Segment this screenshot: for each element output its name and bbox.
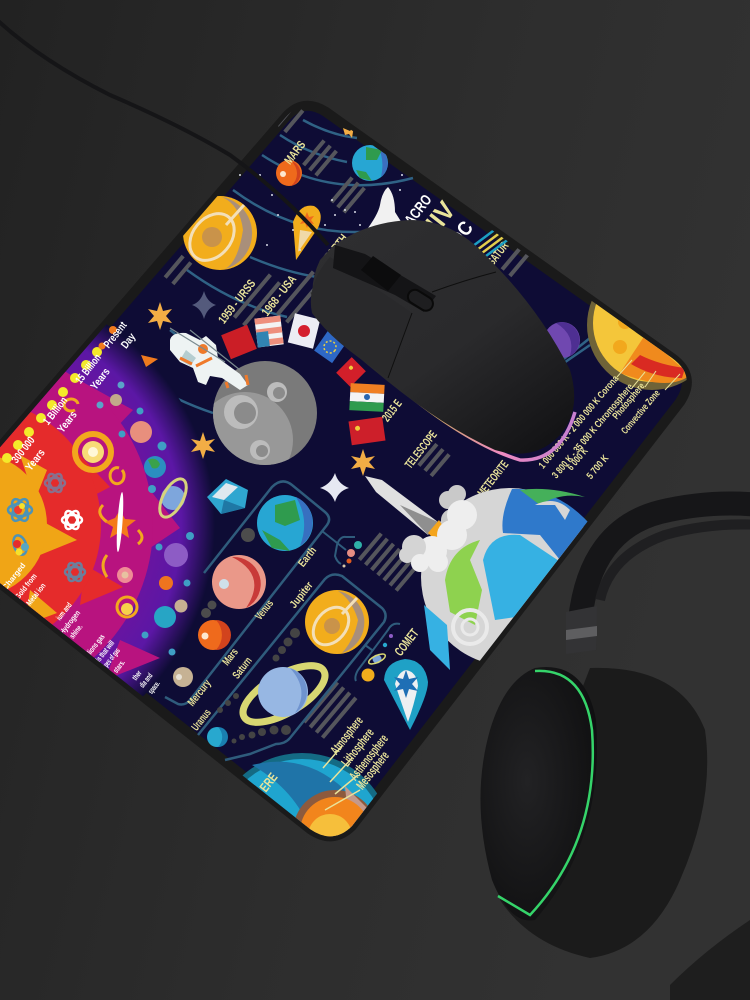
timeline labels: ypes of gas (100, 646, 122, 671)
timeline labels: 300 000 (10, 435, 38, 466)
mouse cable (0, 18, 328, 245)
upper jupiter (181, 196, 257, 270)
top labels: NIV (413, 195, 461, 245)
top labels: ACRO (401, 191, 436, 229)
comet (384, 626, 428, 730)
earth (257, 495, 313, 551)
scroll wheel (361, 256, 401, 291)
inner planets panel: Mars (220, 646, 241, 668)
flags (221, 313, 386, 445)
timeline labels: Gold from (13, 572, 39, 601)
crystal (207, 479, 248, 514)
jupiter (305, 590, 369, 654)
saturn (239, 662, 329, 726)
timeline labels: shine. (68, 622, 85, 641)
bottom earth cutaway: ERE (256, 770, 281, 795)
venus (212, 555, 266, 609)
mercury (173, 667, 193, 687)
upper comet (293, 206, 321, 260)
four point stars (192, 291, 349, 502)
bottom earth cutaway: Lithosphere (338, 725, 377, 769)
top labels: MARS (281, 138, 308, 167)
sun cutaway (587, 260, 717, 390)
timeline labels: Charged (1, 561, 27, 592)
connector (355, 624, 400, 681)
headband (580, 504, 750, 620)
timeline labels: ids that will (92, 639, 116, 666)
top labels: METEORITE (474, 458, 511, 499)
timeline labels: illions gas (83, 632, 107, 658)
inner planets panel: Venus (253, 598, 276, 623)
orbit lines (169, 119, 590, 414)
printed artwork (0, 109, 687, 836)
sun layer labels: 5 700 K (585, 453, 612, 482)
large earth (421, 488, 599, 670)
comet: COMET (391, 626, 422, 659)
top labels: OC (445, 217, 478, 251)
galaxies (64, 399, 142, 617)
mouse (311, 220, 575, 460)
top labels: EARTH (321, 231, 351, 264)
purple spikes (80, 380, 180, 676)
top labels: SATUR (484, 239, 511, 268)
stars in top region (148, 126, 375, 476)
moon (213, 361, 317, 465)
exhaust smoke (399, 485, 477, 572)
top labels (215, 138, 511, 499)
timeline labels: space. (146, 679, 162, 696)
top labels: 2015 E (379, 397, 405, 424)
labels: Jupiter (288, 579, 316, 611)
outer planets panel: Uranus (190, 707, 214, 733)
red ring (80, 455, 123, 605)
inner planets panel: Mercury (186, 677, 214, 709)
timeline labels: ther (130, 669, 144, 682)
bottom right cushion (670, 920, 750, 1000)
timeline labels: Hydrogen (58, 609, 82, 636)
green light (498, 671, 593, 915)
grey bars (165, 104, 528, 738)
sun layer labels: 6 000 K (566, 445, 591, 473)
top labels: TELESCOPE (402, 428, 440, 471)
timeline labels: Present (102, 319, 130, 351)
small bodies in purple band (96, 382, 194, 656)
bottom earth cutaway (212, 713, 392, 933)
headphones (480, 504, 750, 1000)
orange core (20, 455, 77, 625)
timeline labels: ium and (54, 601, 74, 622)
atom icons (8, 472, 85, 583)
mars (198, 620, 231, 650)
timeline labels: 1 Billion (41, 395, 70, 427)
bottom earth cutaway: Atmosphere (327, 713, 366, 757)
sun layer labels: Convective Zone (620, 388, 663, 437)
upper mars (276, 160, 302, 186)
timeline labels: Years (56, 409, 80, 435)
upper earth (352, 145, 388, 181)
hinge (566, 606, 597, 654)
top labels: 1959 - URSS (215, 277, 258, 326)
left button panel (311, 257, 412, 377)
rocket (365, 476, 477, 572)
timeline labels: 15 Billion (73, 352, 104, 386)
edge dots (2, 347, 102, 463)
cushion (500, 668, 707, 958)
bottom earth cutaway: Asthenosphere (346, 731, 391, 783)
sun layer labels: 1 000 000 K - 2 000 000 K Corona (537, 373, 621, 471)
bottom earth cutaway: Mesosphere (353, 748, 392, 792)
pad base (0, 106, 687, 836)
top labels: 1968 - USA (259, 272, 299, 319)
timeline labels (1, 319, 162, 696)
timeline labels: Metal ion (24, 581, 48, 607)
shell (480, 667, 597, 920)
timeline labels: stars. (111, 658, 127, 675)
labels: Earth (296, 545, 319, 570)
mouse seam lines (388, 272, 496, 378)
connector (322, 531, 355, 564)
timeline labels: Years (89, 366, 113, 392)
supernova star (105, 510, 136, 538)
mouse glow rim (312, 292, 575, 460)
sun layer labels: Photosphere (611, 381, 648, 422)
outer planets panel: Saturn (231, 655, 255, 681)
nebula rings (0, 324, 212, 696)
inner planets panel (165, 481, 362, 709)
timeline labels: Years (24, 447, 48, 473)
timeline labels: Day (119, 331, 139, 351)
uranus (207, 727, 228, 747)
timeline labels: dia and (138, 671, 155, 690)
shuttle (368, 187, 401, 228)
outer planets panel (190, 575, 400, 760)
sun layer labels: 3 800 K - 35 000 K Chromosphere (550, 382, 636, 481)
pennant (141, 355, 158, 367)
purple planet (544, 322, 580, 358)
small star dots (239, 174, 403, 251)
astronaut (170, 328, 248, 390)
dpi button (405, 287, 436, 313)
